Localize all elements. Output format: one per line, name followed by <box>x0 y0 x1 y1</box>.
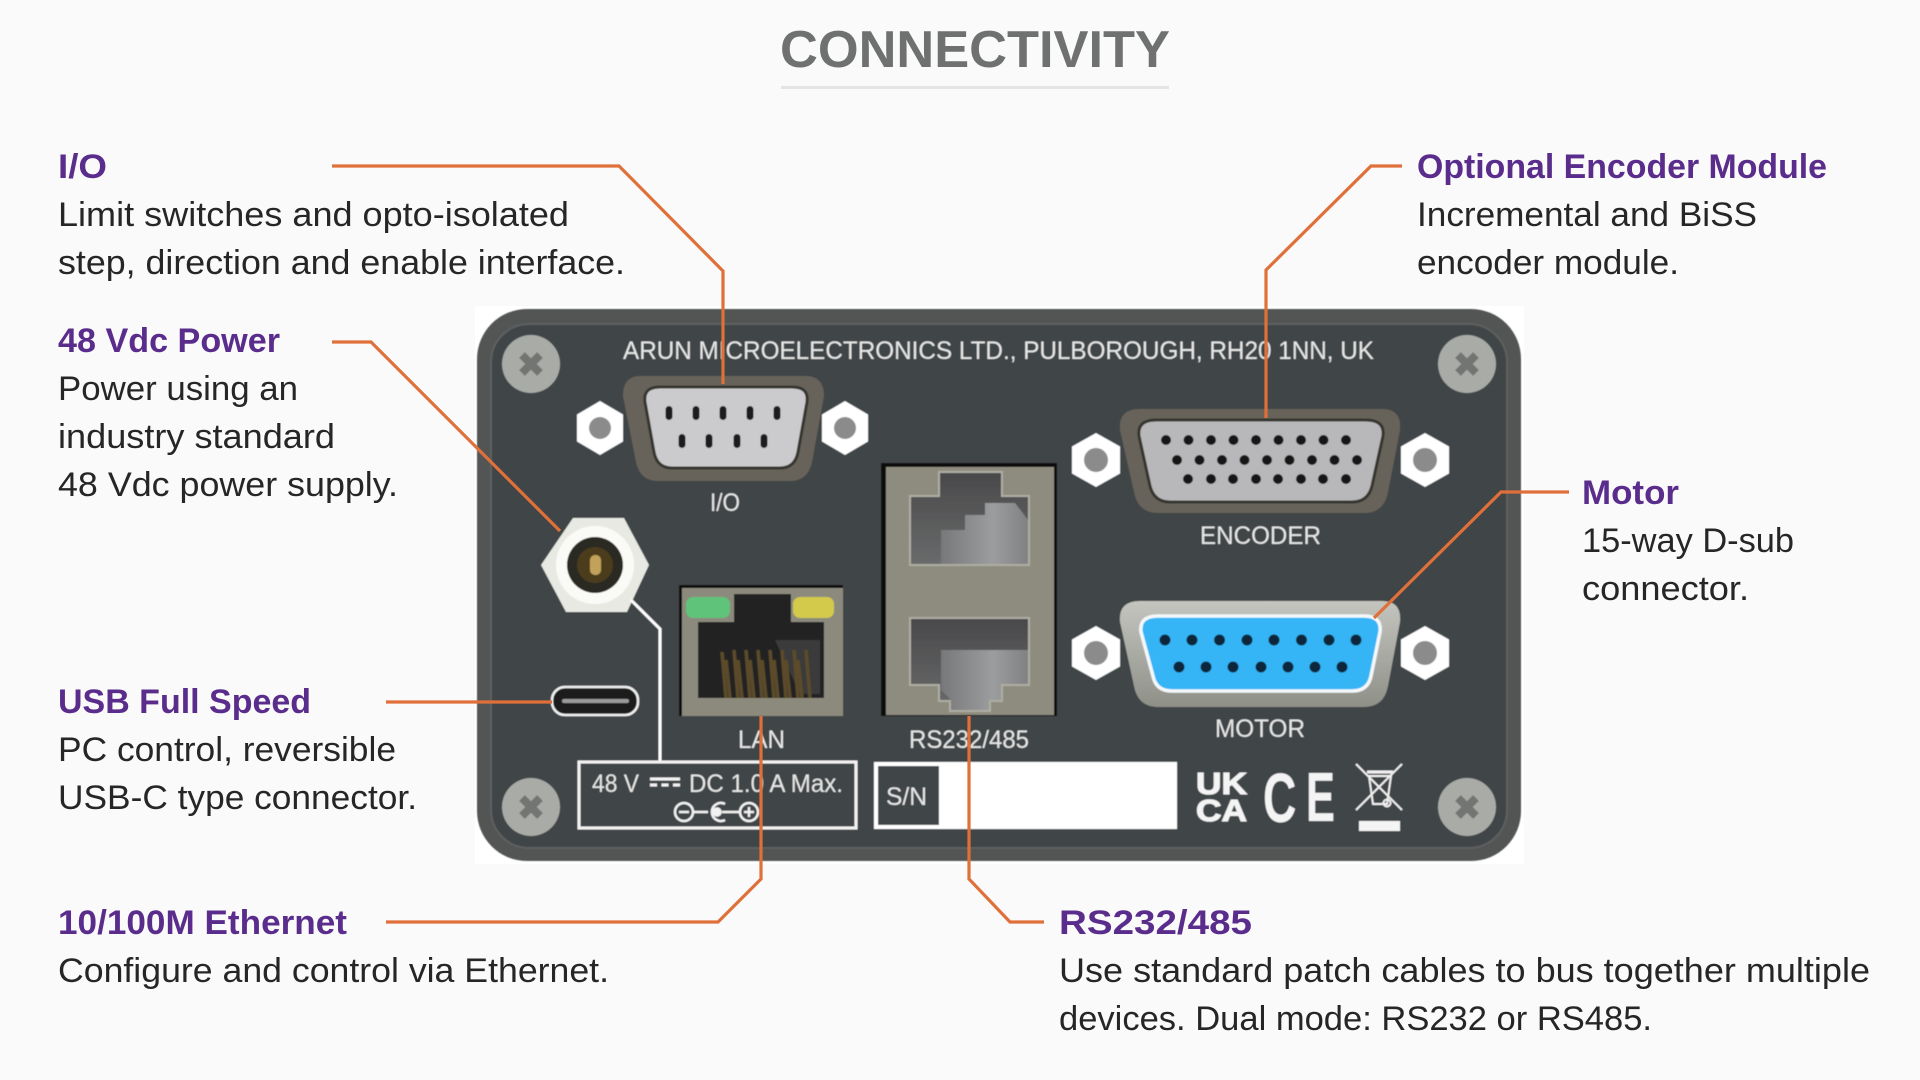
text block: RS232/485: Use standard patch cables to bus together multiple <box>1059 952 1870 990</box>
label: RS232/485: RS232/485 <box>909 726 1029 754</box>
connector: USB-C <box>552 687 638 715</box>
callout line: USB <box>386 700 552 704</box>
panel body <box>477 309 1521 861</box>
text block: RS232/485: RS232/485 <box>1059 904 1252 942</box>
callout line: Motor <box>1374 492 1569 618</box>
icon: UKCA mark <box>1196 766 1248 828</box>
text block: 48 Vdc Power: industry standard <box>58 418 335 456</box>
text block: RS232/485 <box>1059 904 1870 1038</box>
callout line: RS232/485 <box>969 716 1044 922</box>
text block: Motor <box>1582 474 1794 608</box>
text block: Ethernet: Configure and control via Ethernet. <box>58 952 609 990</box>
callout line: 48 Vdc Power <box>332 342 560 531</box>
text block: Optional Encoder Module: Incremental and BiSS <box>1417 196 1757 234</box>
title: CONNECTIVITY <box>780 21 1170 79</box>
connector: power jack <box>541 518 649 612</box>
label: ENCODER: ENCODER <box>1200 522 1321 550</box>
label: LAN: LAN <box>738 726 785 754</box>
icon: CE mark: E <box>1306 758 1335 837</box>
text block: I/O: step, direction and enable interface. <box>58 244 625 282</box>
icon: corner screws <box>502 335 1496 836</box>
text block: Optional Encoder Module <box>1417 148 1827 282</box>
text block: 48 Vdc Power: Power using an <box>58 370 298 408</box>
text block: Motor: 15-way D-sub <box>1582 522 1794 560</box>
text block: Ethernet: 10/100M Ethernet <box>58 904 347 942</box>
callout line: I/O <box>332 166 723 384</box>
power rating box: DC 1.0 A Max. <box>689 770 843 798</box>
text block: Optional Encoder Module: Optional Encoder Module <box>1417 148 1827 186</box>
text block: I/O: Limit switches and opto-isolated <box>58 196 569 234</box>
serial number box <box>874 762 1177 829</box>
text block: I/O: I/O <box>58 148 107 186</box>
text block: 48 Vdc Power: 48 Vdc power supply. <box>58 466 398 504</box>
connector: LAN RJ45 <box>679 585 843 716</box>
text block: USB Full Speed: USB-C type connector. <box>58 779 417 817</box>
connector: I/O DE-9 <box>577 376 868 481</box>
icon: UKCA mark: UK <box>1196 766 1248 801</box>
power rating box: 48 V <box>592 770 639 798</box>
text block: USB Full Speed: USB Full Speed <box>58 683 311 721</box>
panel: device rear panel <box>477 309 1521 861</box>
icon: CE mark: C <box>1263 758 1296 837</box>
text block: Motor: Motor <box>1582 474 1679 512</box>
connector: RS232/485 dual RJ45 <box>881 463 1057 716</box>
icon: CE mark <box>1263 758 1335 837</box>
callout line: Ethernet <box>386 716 761 922</box>
manufacturer text: ARUN MICROELECTRONICS LTD., PULBOROUGH, RH20 1NN, UK <box>623 337 1374 365</box>
connector: encoder HD-26 <box>1072 409 1449 513</box>
text block: 48 Vdc Power: 48 Vdc Power <box>58 322 280 360</box>
text block: USB Full Speed <box>58 683 417 817</box>
text block: USB Full Speed: PC control, reversible <box>58 731 396 769</box>
text block: I/O <box>58 148 625 282</box>
callout line: Encoder <box>1266 166 1402 418</box>
power rating box <box>579 762 856 828</box>
text block: Optional Encoder Module: encoder module. <box>1417 244 1679 282</box>
icon: WEEE bin <box>1356 764 1402 831</box>
text block: 48 Vdc Power <box>58 322 398 504</box>
power label leader <box>631 600 660 762</box>
icon: UKCA mark: CA <box>1196 793 1247 828</box>
serial number box: S/N <box>886 783 927 811</box>
label: I/O: I/O <box>710 489 740 517</box>
label: MOTOR: MOTOR <box>1215 715 1305 743</box>
connector: motor DA-15 <box>1072 601 1449 707</box>
text block: Motor: connector. <box>1582 570 1749 608</box>
text block: RS232/485: devices. Dual mode: RS232 or RS485. <box>1059 1000 1652 1038</box>
text block: Ethernet <box>58 904 609 990</box>
